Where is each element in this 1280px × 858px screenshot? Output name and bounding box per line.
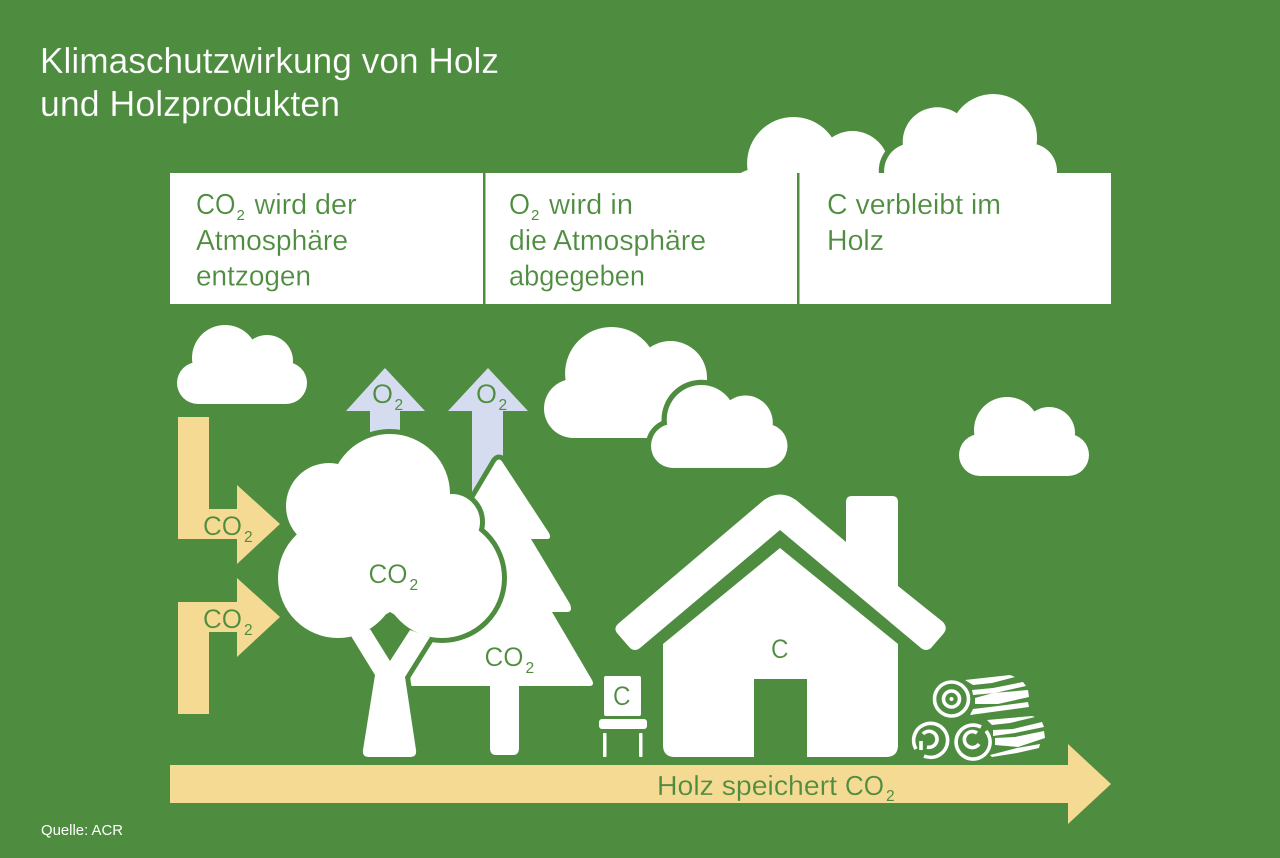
arrow: O2 out from fir bbox=[448, 368, 528, 500]
text: O2 released to atmosphere: O bbox=[509, 189, 530, 221]
label: CO2 tree: CO bbox=[368, 559, 408, 589]
panel: header boxes bbox=[170, 173, 1111, 304]
arrow: CO2 in, lower: 2 bbox=[244, 622, 253, 639]
text: O2 released to atmosphere: wird in bbox=[548, 189, 633, 221]
title bbox=[40, 40, 499, 124]
source note: Quelle: ACR bbox=[41, 822, 123, 839]
label: C house: C bbox=[771, 634, 788, 664]
text: O2 released to atmosphere: die Atmosphäre bbox=[509, 225, 706, 257]
arrow: wood stores CO2 bbox=[170, 744, 1111, 824]
label: CO2 fir: 2 bbox=[526, 660, 534, 677]
house body bbox=[663, 548, 898, 757]
icon: log pile bbox=[914, 675, 1045, 759]
text: CO2 removed from atmosphere: entzogen bbox=[196, 260, 311, 292]
arrow: wood stores CO2: Holz speichert bbox=[657, 770, 837, 801]
title: Klimaschutzwirkung von Holz bbox=[40, 40, 499, 81]
text: O2 released to atmosphere: abgegeben bbox=[509, 260, 645, 292]
label: CO2 fir: CO bbox=[484, 642, 524, 672]
log bottom right bbox=[987, 716, 1045, 757]
cloud: right bbox=[959, 397, 1089, 476]
text: CO2 removed from atmosphere: CO bbox=[196, 189, 236, 221]
arrow: CO2 in, upper: CO bbox=[203, 511, 242, 541]
label: C chair: C bbox=[613, 681, 630, 711]
icon: chair bbox=[599, 676, 647, 757]
icon: fir tree bbox=[410, 460, 593, 755]
arrow: CO2 in, lower bbox=[178, 578, 280, 714]
icon: deciduous tree bbox=[278, 434, 502, 757]
clouds: centre pair bbox=[544, 327, 788, 468]
log bottom left bbox=[914, 723, 948, 757]
text: CO2 removed from atmosphere: 2 bbox=[236, 207, 245, 224]
clouds above header boxes bbox=[726, 94, 1057, 228]
text: C stays in wood: C verbleibt im bbox=[827, 189, 1001, 221]
log top bbox=[965, 675, 1029, 715]
arrow: CO2 in, upper: 2 bbox=[244, 529, 253, 546]
title: und Holzprodukten bbox=[40, 83, 340, 124]
label: O2 second arrow: O bbox=[476, 379, 497, 409]
text: C stays in wood: Holz bbox=[827, 225, 884, 257]
text: CO2 removed from atmosphere: wird der bbox=[254, 189, 357, 221]
arrow: CO2 in, upper bbox=[178, 417, 280, 564]
cloud: left bbox=[177, 325, 307, 404]
arrow: O2 out from tree bbox=[346, 368, 425, 440]
text: CO2 removed from atmosphere: Atmosphäre bbox=[196, 225, 348, 257]
text: O2 released to atmosphere: 2 bbox=[531, 207, 539, 224]
label: CO2 tree: 2 bbox=[410, 577, 418, 594]
label: O2 first arrow: O bbox=[372, 379, 393, 409]
icon: house bbox=[615, 494, 946, 757]
label: O2 second arrow: 2 bbox=[498, 397, 507, 414]
arrow: CO2 in, lower: CO bbox=[203, 604, 242, 634]
label: O2 first arrow: 2 bbox=[394, 397, 403, 414]
arrow: wood stores CO2: CO bbox=[845, 770, 884, 801]
arrow: wood stores CO2: 2 bbox=[886, 788, 895, 805]
roof and chimney bbox=[615, 494, 946, 650]
